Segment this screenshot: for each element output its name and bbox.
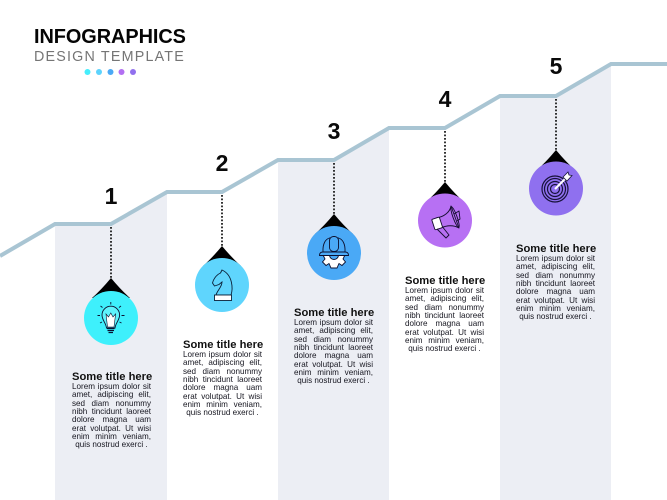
text block: step 4: sed diam nonummy xyxy=(405,303,484,312)
text block: step 2: erat volutpat. Ut wisi xyxy=(183,392,262,401)
text block: step 4: enim minim veniam, xyxy=(405,336,484,345)
text block: step 2: enim minim veniam, xyxy=(183,400,262,409)
icon: lightbulb xyxy=(98,302,124,332)
text block: step 1: Lorem ipsum dolor sit xyxy=(72,382,151,391)
number 3: 3 xyxy=(328,118,340,144)
text block: step 3: Lorem ipsum dolor sit xyxy=(294,318,373,327)
text block: step 1: enim minim veniam, xyxy=(72,432,151,441)
text block: step 1: quis nostrud exerci . xyxy=(75,440,148,449)
text block: step 5: Some title here xyxy=(516,243,596,255)
marker: step 3 helmet and gear xyxy=(307,163,361,280)
text block: step 2: sed diam nonummy xyxy=(183,367,262,376)
text block: step 4: Lorem ipsum dolor sit xyxy=(405,286,484,295)
marker: step 2 chess knight xyxy=(195,195,249,312)
text block: step 3: enim minim veniam, xyxy=(294,368,373,377)
text block: step 2: Some title here xyxy=(183,339,263,351)
icon: target with arrow xyxy=(542,172,572,202)
text block: step 2: nibh tincidunt laoreet xyxy=(183,375,262,384)
text block: step 3: nibh tincidunt laoreet xyxy=(294,343,373,352)
text block: step 5: quis nostrud exerci . xyxy=(519,312,592,321)
text block: step 4: amet, adipiscing elit, xyxy=(405,294,484,303)
marker: step 4 megaphone xyxy=(418,131,472,248)
text block: step 4: quis nostrud exerci . xyxy=(408,344,481,353)
number 4: 4 xyxy=(439,86,451,112)
panel: step 3 column xyxy=(278,128,389,500)
number 5: 5 xyxy=(550,53,562,79)
text block: step 1: dolore magna uam xyxy=(72,415,151,424)
text block: step 3: amet, adipiscing elit, xyxy=(294,326,373,335)
text block: step 3 xyxy=(294,307,374,385)
text block: step 1: sed diam nonummy xyxy=(72,399,151,408)
text block: step 3: dolore magna uam xyxy=(294,351,373,360)
subheading: DESIGN TEMPLATE: DESIGN TEMPLATE xyxy=(34,49,185,65)
panel: step 1 column xyxy=(55,192,167,500)
text block: step 1 xyxy=(72,371,152,449)
panel: step 5 column xyxy=(500,64,611,500)
text block: step 1: nibh tincidunt laoreet xyxy=(72,407,151,416)
text block: step 4: dolore magna uam xyxy=(405,319,484,328)
title dots xyxy=(84,69,136,75)
text block: step 2: amet, adipiscing elit, xyxy=(183,358,262,367)
heading: INFOGRAPHICS: INFOGRAPHICS xyxy=(34,26,186,48)
number 2: 2 xyxy=(216,150,228,176)
text block: step 4: nibh tincidunt laoreet xyxy=(405,311,484,320)
text block: step 3: Some title here xyxy=(294,307,374,319)
text block: step 1: Some title here xyxy=(72,371,152,383)
text block: step 1: erat volutpat. Ut wisi xyxy=(72,424,151,433)
number 1: 1 xyxy=(105,183,117,209)
text block: step 3: sed diam nonummy xyxy=(294,335,373,344)
text block: step 2: Lorem ipsum dolor sit xyxy=(183,350,262,359)
icon: megaphone xyxy=(432,206,461,238)
text block: step 5: erat volutpat. Ut wisi xyxy=(516,296,595,305)
text block: step 5 xyxy=(516,243,596,321)
marker: step 1 lightbulb xyxy=(84,227,138,345)
text block: step 5: sed diam nonummy xyxy=(516,271,595,280)
icon: chess knight xyxy=(212,270,232,300)
text block: step 5: amet, adipiscing elit, xyxy=(516,262,595,271)
text block: step 1: amet, adipiscing elit, xyxy=(72,390,151,399)
text block: step 2: dolore magna uam xyxy=(183,383,262,392)
text block: step 4: Some title here xyxy=(405,275,485,287)
icon: helmet with gear xyxy=(320,236,348,268)
text block: step 2 xyxy=(183,339,263,417)
text block: step 2: quis nostrud exerci . xyxy=(186,408,259,417)
text block: step 5: nibh tincidunt laoreet xyxy=(516,279,595,288)
text block: step 3: quis nostrud exerci . xyxy=(297,376,370,385)
stepped rising line xyxy=(0,64,667,256)
text block: step 3: erat volutpat. Ut wisi xyxy=(294,360,373,369)
text block: step 4 xyxy=(405,275,485,353)
text block: step 5: Lorem ipsum dolor sit xyxy=(516,254,595,263)
text block: step 5: dolore magna uam xyxy=(516,287,595,296)
text block: step 4: erat volutpat. Ut wisi xyxy=(405,328,484,337)
text block: step 5: enim minim veniam, xyxy=(516,304,595,313)
marker: step 5 target xyxy=(529,99,583,216)
